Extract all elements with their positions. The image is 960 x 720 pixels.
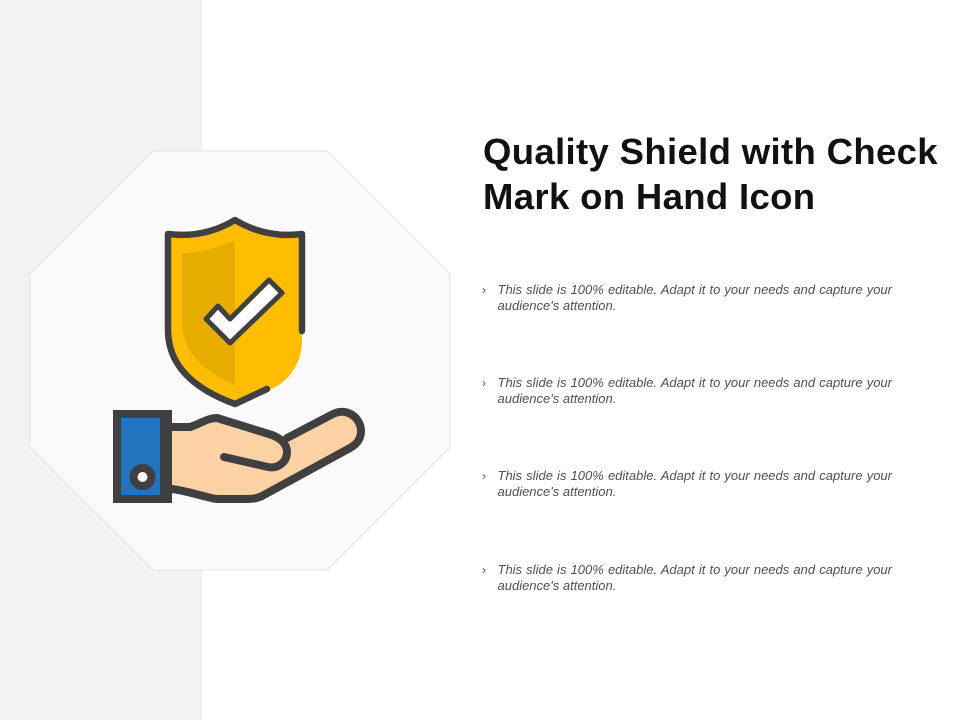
panel: octagon	[30, 151, 450, 570]
text block 4: ›	[482, 563, 486, 577]
text block 2: audience's attention.	[498, 391, 616, 406]
text block 2: ›	[482, 376, 486, 390]
text block 3: This slide is 100% editable. Adapt it to your needs and capture your	[498, 468, 892, 483]
title	[483, 131, 938, 217]
text block 1: audience's attention.	[498, 298, 616, 313]
title: Mark on Hand Icon	[483, 176, 815, 217]
icon: quality shield with check mark	[168, 220, 302, 404]
text block 1	[482, 282, 892, 313]
text block 2: This slide is 100% editable. Adapt it to your needs and capture your	[498, 375, 892, 390]
text block 3: ›	[482, 469, 486, 483]
text block 1: This slide is 100% editable. Adapt it to your needs and capture your	[498, 282, 892, 297]
text block 2	[482, 375, 892, 406]
text block 1: ›	[482, 283, 486, 297]
title: Quality Shield with Check	[483, 131, 938, 172]
icon: open hand with sleeve	[113, 410, 361, 503]
left grey band	[0, 0, 202, 720]
text block 3: audience's attention.	[498, 484, 616, 499]
text block 4: audience's attention.	[498, 578, 616, 593]
text block 4	[482, 562, 892, 593]
text block 4: This slide is 100% editable. Adapt it to your needs and capture your	[498, 562, 892, 577]
text block 3	[482, 468, 892, 499]
